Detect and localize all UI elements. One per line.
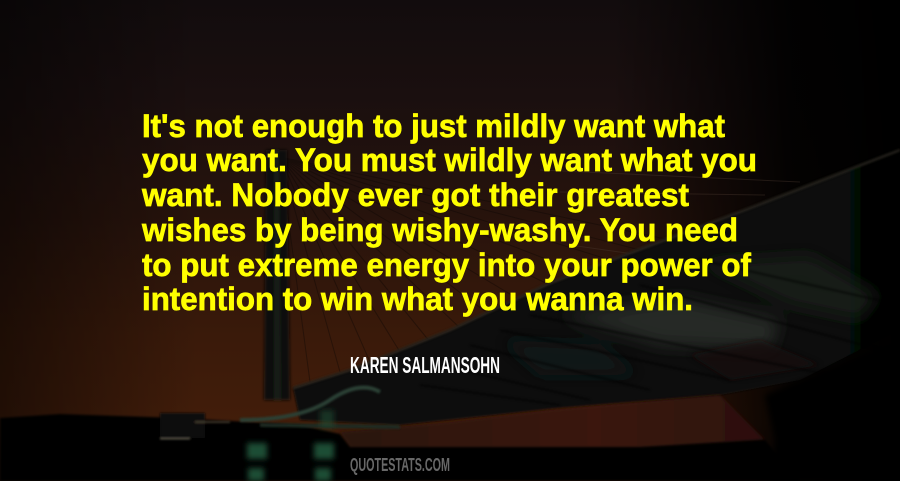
green lights bbox=[247, 410, 334, 481]
orange river band bbox=[340, 395, 765, 448]
deck edge bbox=[293, 150, 900, 388]
quote line 4: wishes by being wishy-washy. You need bbox=[141, 212, 738, 248]
bridge highlighted cables bbox=[540, 170, 800, 255]
left shore bbox=[160, 413, 230, 440]
quote line 5: to put extreme energy into your power of bbox=[142, 247, 751, 283]
green arch bbox=[240, 388, 400, 427]
quote line 2: you want. You must wildly want what you bbox=[142, 142, 757, 178]
dark foreground bbox=[0, 414, 800, 481]
bridge pylon bbox=[264, 150, 290, 400]
bridge deck underside bbox=[293, 150, 900, 425]
deck reddish patch bbox=[690, 340, 820, 380]
deck panels bbox=[500, 255, 880, 375]
quote line 3: want. Nobody ever got their greatest bbox=[141, 177, 689, 213]
watermark: QUOTESTATS.COM bbox=[350, 455, 450, 475]
quote line 1: It's not enough to just mildly want what bbox=[142, 108, 725, 144]
quote text bbox=[141, 108, 757, 317]
deck slat lines bbox=[420, 260, 900, 405]
quote line 6: intention to win what you wanna win. bbox=[142, 281, 693, 317]
background: bridge bbox=[0, 150, 900, 481]
bridge cables bbox=[280, 157, 670, 382]
author name: KAREN SALMANSOHN bbox=[350, 352, 500, 378]
dark lower right corner bbox=[765, 340, 900, 481]
